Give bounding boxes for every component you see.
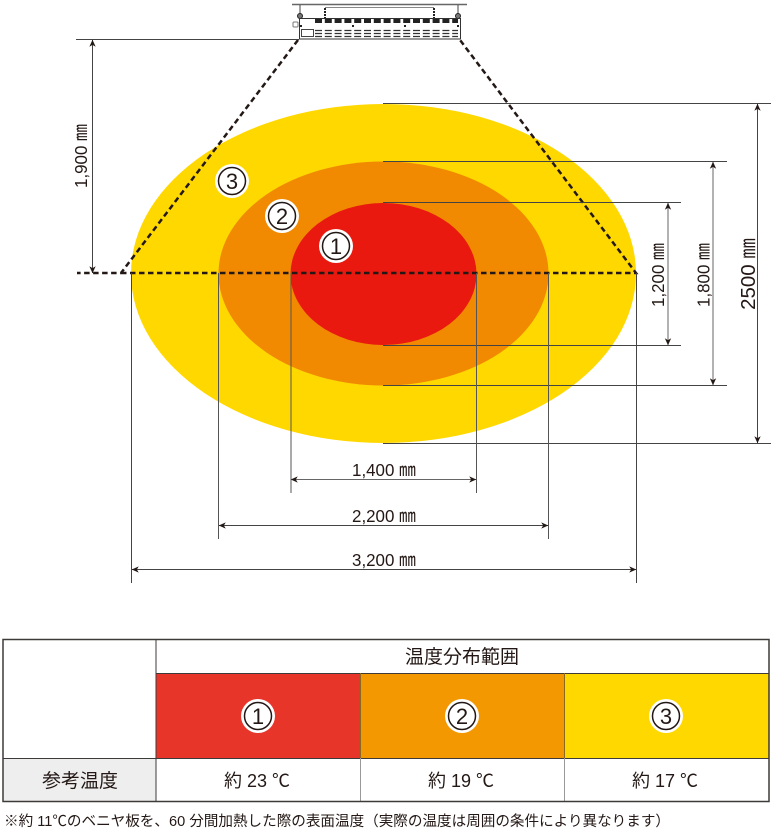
table marker 1 [241, 699, 275, 733]
height dimension: 1,800 mm [383, 162, 727, 386]
marker 3 on diagram [215, 164, 249, 198]
table marker 2 [445, 699, 479, 733]
row label: 参考温度 [42, 770, 118, 792]
zone 2 ellipse [218, 162, 548, 386]
height dimension: 2500 mm [383, 104, 771, 444]
height dimension: 2500 mm: 2500 ㎜ [737, 238, 760, 310]
temperature table [3, 639, 769, 802]
table marker 3: 3 [660, 704, 672, 729]
width dimension: 3,200 mm [132, 273, 636, 583]
marker 1 on diagram [319, 229, 353, 263]
height dimension: 1,800 mm: 1,800 ㎜ [693, 243, 714, 307]
zone 1 ellipse [290, 203, 476, 345]
table marker 3 [649, 699, 683, 733]
heat spread dashed outline [77, 40, 636, 273]
table marker 2: 2 [456, 704, 468, 729]
colour cell 3 [564, 673, 769, 758]
height dimension: 1,200 mm [383, 202, 681, 346]
table marker 1: 1 [252, 704, 264, 729]
footnote: ※約 11℃のベニヤ板を、60 分間加熱した際の表面温度（実際の温度は周囲の条件により異なります） [4, 813, 670, 830]
width dimension: 3,200 mm: 3,200 ㎜ [352, 550, 416, 570]
heater unit [292, 4, 467, 39]
height dimension: 1,900 mm: 1,900 ㎜ [71, 124, 91, 188]
heat distribution ellipses [131, 104, 636, 443]
temperature 2: 約 19 ℃ [428, 771, 494, 791]
table heading: 温度分布範囲 [405, 646, 519, 668]
marker 3 on diagram: 3 [226, 169, 238, 194]
temperature 3: 約 17 ℃ [632, 771, 698, 791]
width dimension: 1,400 mm: 1,400 ㎜ [352, 460, 416, 480]
height dimension: 1,200 mm: 1,200 ㎜ [648, 243, 668, 307]
marker 2 on diagram: 2 [276, 204, 288, 229]
temperature 1: 約 23 ℃ [224, 771, 290, 791]
zone 3 ellipse [131, 104, 636, 443]
row label background [3, 758, 156, 801]
marker 1 on diagram: 1 [330, 234, 342, 259]
width dimension: 2,200 mm [218, 273, 548, 539]
colour cell 2 [360, 673, 564, 758]
colour cell 1 [156, 673, 360, 758]
width dimension: 2,200 mm: 2,200 ㎜ [352, 506, 416, 526]
width dimension: 1,400 mm [291, 273, 476, 493]
marker 2 on diagram [265, 199, 299, 233]
